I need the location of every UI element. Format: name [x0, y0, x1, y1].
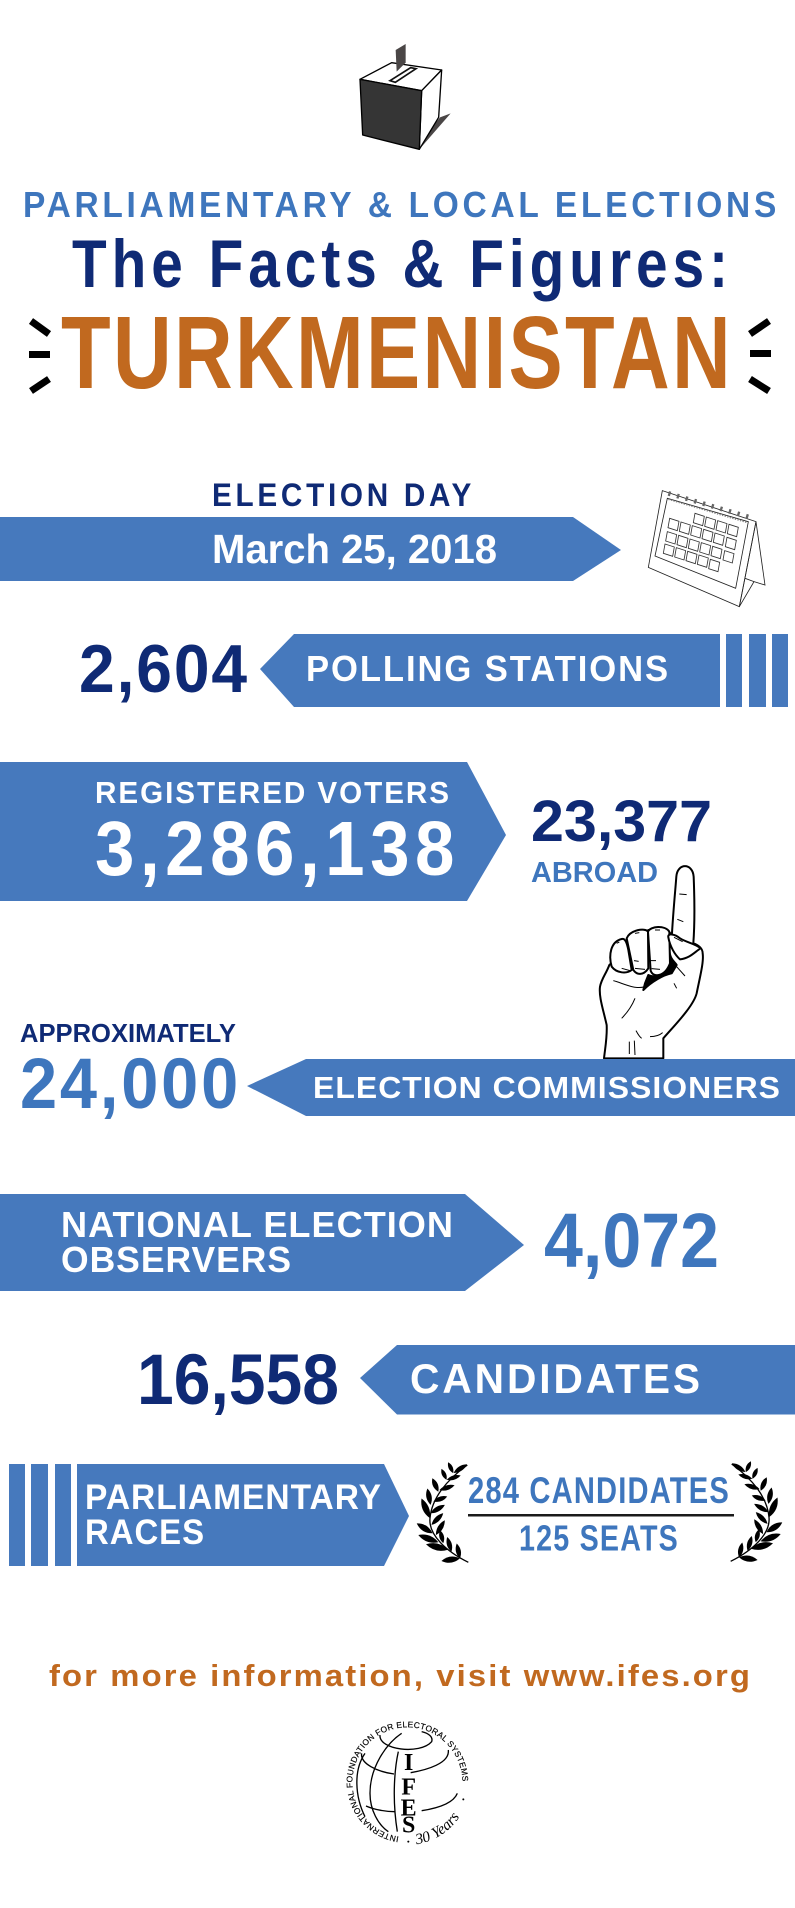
banner: national election observers: NATIONAL ELECTION — [61, 1204, 454, 1245]
banner: parliamentary races — [9, 1464, 409, 1566]
stat: 23,377 abroad — [531, 789, 712, 889]
icon: ballot box — [360, 44, 451, 149]
stat: 23,377 abroad: ABROAD — [531, 857, 658, 889]
stat: 284 candidates over 125 seats: 125 SEATS — [519, 1518, 679, 1558]
banner: parliamentary races: RACES — [85, 1513, 205, 1552]
banner: March 25, 2018: March 25, 2018 — [212, 526, 497, 572]
icon: hand with index finger raised — [600, 866, 703, 1058]
banner: election commissioners: ELECTION COMMISSIONERS — [313, 1071, 781, 1105]
stat: 284 candidates over 125 seats — [468, 1470, 734, 1558]
icon: desk calendar — [648, 491, 765, 607]
footer: website link text: for more information, visit www.ifes.org — [49, 1658, 752, 1693]
banner: national election observers — [0, 1194, 524, 1291]
banner: polling stations — [260, 634, 788, 707]
stat: 284 candidates over 125 seats: 284 CANDIDATES — [468, 1470, 730, 1511]
banner: March 25, 2018 — [0, 517, 621, 581]
banner: election commissioners — [247, 1059, 795, 1116]
logo: IFES globe seal: I — [404, 1750, 413, 1776]
banner: polling stations: POLLING STATIONS — [306, 648, 670, 689]
logo: IFES globe seal: E — [401, 1796, 417, 1822]
icon: right laurel branch — [731, 1460, 784, 1563]
stat: 23,377 abroad: 23,377 — [531, 789, 712, 854]
banner: registered voters: 3,286,138 — [95, 806, 460, 892]
label: election day: ELECTION DAY — [212, 477, 475, 513]
banner: candidates: CANDIDATES — [410, 1355, 703, 1402]
banner: national election observers: OBSERVERS — [61, 1239, 292, 1280]
logo: IFES globe seal: F — [401, 1775, 416, 1801]
banner: registered voters: REGISTERED VOTERS — [95, 776, 451, 810]
stat: 2,604: 2,604 — [79, 631, 249, 707]
logo: IFES globe seal: S — [402, 1812, 415, 1838]
stat: approximately 24,000: 24,000 — [20, 1045, 241, 1124]
stat: approximately 24,000: APPROXIMATELY — [20, 1020, 236, 1048]
sparks: left of country name — [29, 321, 50, 391]
stat: 4,072: 4,072 — [544, 1198, 719, 1284]
icon: left laurel branch — [415, 1461, 468, 1564]
banner: parliamentary races: PARLIAMENTARY — [85, 1478, 382, 1517]
logo: IFES globe seal: INTERNATIONAL FOUNDATION FOR ELECTORAL SYSTEMS — [346, 1722, 468, 1842]
banner: candidates — [360, 1345, 795, 1414]
banner: registered voters — [0, 762, 506, 901]
stat: 16,558: 16,558 — [137, 1341, 339, 1420]
sparks: right of country name — [750, 321, 771, 391]
logo: IFES globe seal: 30 Years — [416, 1813, 458, 1844]
